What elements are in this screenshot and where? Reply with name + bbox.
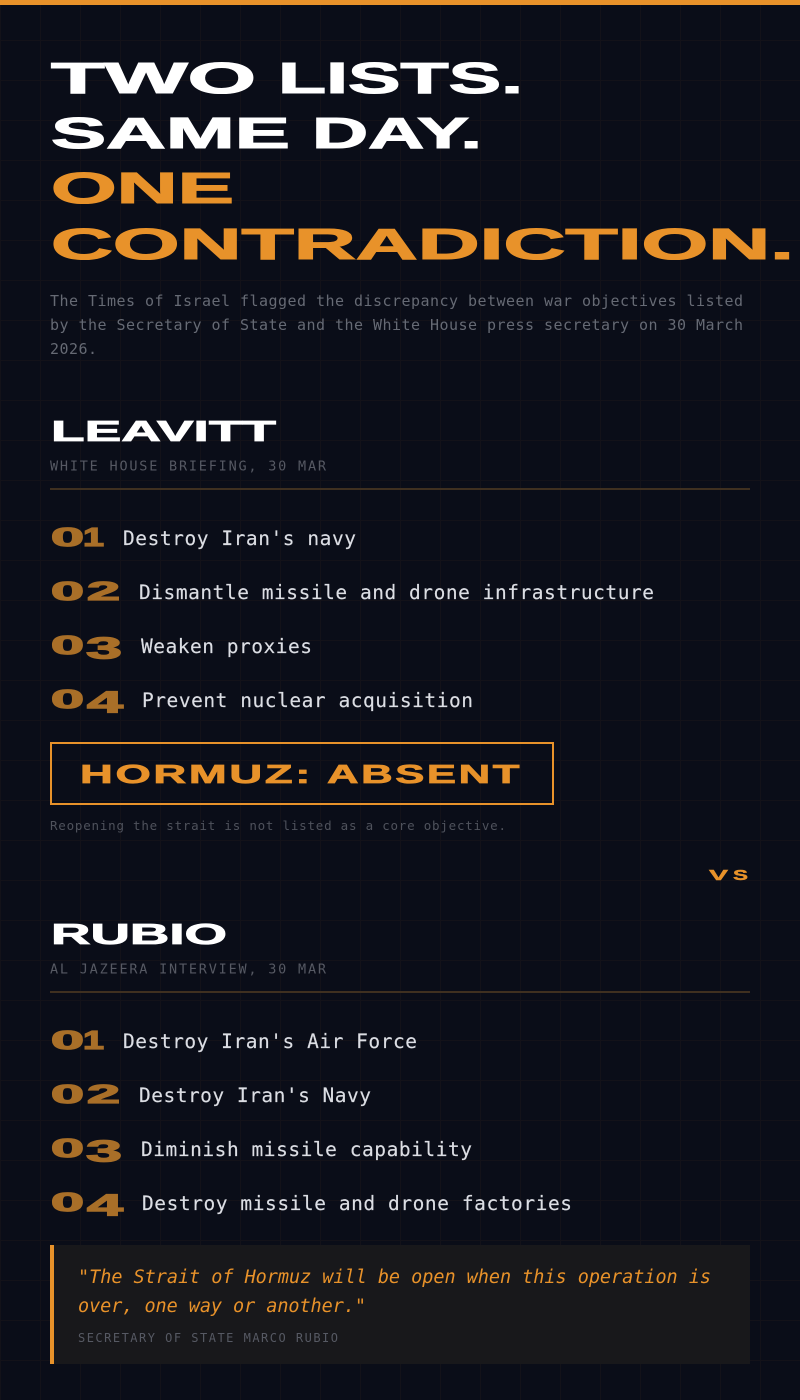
item 01: 0 [51,1027,84,1055]
quote text: "The Strait of Hormuz will be open when this operation is [78,1267,711,1288]
title: SAME [51,110,290,158]
callout note: Reopening the strait is not listed as a core objective. [50,818,506,833]
title [51,55,794,269]
intro text: The Times of Israel flagged the discrepancy between war objectives listed [50,292,743,310]
title: LISTS. [278,55,523,103]
item 01: Destroy Iran's navy [123,527,356,550]
title: CONTRADICTION. [51,221,794,269]
item 03 [51,632,312,666]
item 02: Dismantle missile and drone infrastructure [139,581,654,604]
item 02: 2 [87,1081,120,1109]
item 03 [51,1134,472,1168]
callout: Hormuz absent: HORMUZ: [80,761,313,789]
source: White House briefing: WHITE HOUSE BRIEFING, 30 MAR [50,458,327,474]
title: TWO [51,55,256,103]
item 02 [51,1081,371,1109]
item 04: 4 [87,1188,123,1222]
heading: Leavitt: LEAVITT [51,416,277,448]
source: Al Jazeera interview: AL JAZEERA INTERVIEW, 30 MAR [50,962,327,978]
panel: Rubio list [50,919,750,1364]
item 04 [51,1188,572,1222]
item 03: 3 [86,1134,122,1168]
callout: Hormuz absent [51,743,553,804]
quote panel [50,1245,750,1364]
versus label: V [709,868,729,884]
panel: Leavitt list [50,416,750,833]
versus label [709,868,749,884]
item 01: Destroy Iran's Air Force [123,1030,417,1053]
item 04: 0 [51,1189,84,1217]
item 01 [51,524,356,552]
title: ONE [51,165,234,213]
intro text [50,292,743,358]
item 03: Weaken proxies [141,635,312,658]
item 04: Destroy missile and drone factories [142,1192,572,1215]
item 03: 0 [51,1135,84,1163]
item 04 [51,686,473,720]
item 03: 3 [86,632,122,666]
item 02: Destroy Iran's Navy [139,1084,371,1107]
intro text: by the Secretary of State and the White House press secretary on 30 March [50,316,743,334]
item 04: 0 [51,686,84,714]
item 02: 0 [51,1081,84,1109]
quote attribution: SECRETARY OF STATE MARCO RUBIO [78,1331,338,1345]
item 01: 1 [83,524,104,552]
item 02: 0 [51,578,84,606]
item 01 [51,1027,417,1055]
versus label: S [733,868,749,884]
item 01: 0 [51,524,84,552]
quote text [78,1267,711,1317]
item 01: 1 [83,1027,104,1055]
item 03: Diminish missile capability [141,1138,472,1161]
title: DAY. [312,110,482,158]
quote text: over, one way or another." [78,1296,366,1317]
intro text: 2026. [50,340,97,358]
heading: Rubio: RUBIO [51,919,227,951]
item 04: Prevent nuclear acquisition [142,689,473,712]
item 04: 4 [87,686,123,720]
top accent bar [0,0,800,5]
item 02: 2 [87,578,120,606]
item 03: 0 [51,632,84,660]
callout: Hormuz absent: ABSENT [327,761,522,789]
